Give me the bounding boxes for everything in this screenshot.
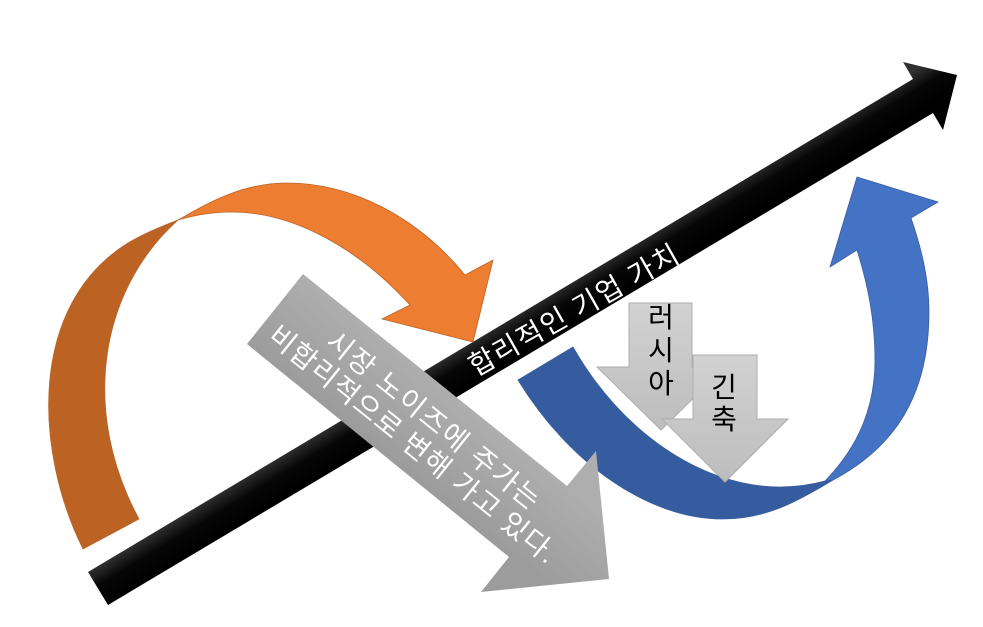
arrow: tightening bbox=[662, 355, 788, 482]
arrow: orange curved arrow bbox=[49, 183, 493, 549]
label: market noise text: 비합리적으로 변해 가고 있다. bbox=[263, 320, 563, 569]
label: rational corporate value: 합리적인 기업 가치 bbox=[463, 239, 684, 382]
label: market noise text: 시장 노이즈에 주가는 bbox=[320, 325, 546, 515]
label: Russia bbox=[648, 302, 674, 399]
label: tightening bbox=[711, 372, 737, 435]
orange arrow head bbox=[178, 183, 493, 342]
label: tightening: 축 bbox=[711, 404, 737, 435]
label: Russia: 시 bbox=[648, 335, 674, 366]
label: tightening: 긴 bbox=[711, 372, 737, 403]
label: Russia: 러 bbox=[648, 302, 674, 333]
blue arrow tail bbox=[518, 347, 833, 519]
arrow: market noise bbox=[247, 274, 609, 592]
arrow: Russia bbox=[597, 302, 725, 430]
arrow: blue curved arrow bbox=[518, 177, 938, 519]
label: Russia: 아 bbox=[648, 368, 674, 399]
orange arrow tail bbox=[49, 220, 178, 549]
blue arrow head bbox=[825, 177, 938, 481]
